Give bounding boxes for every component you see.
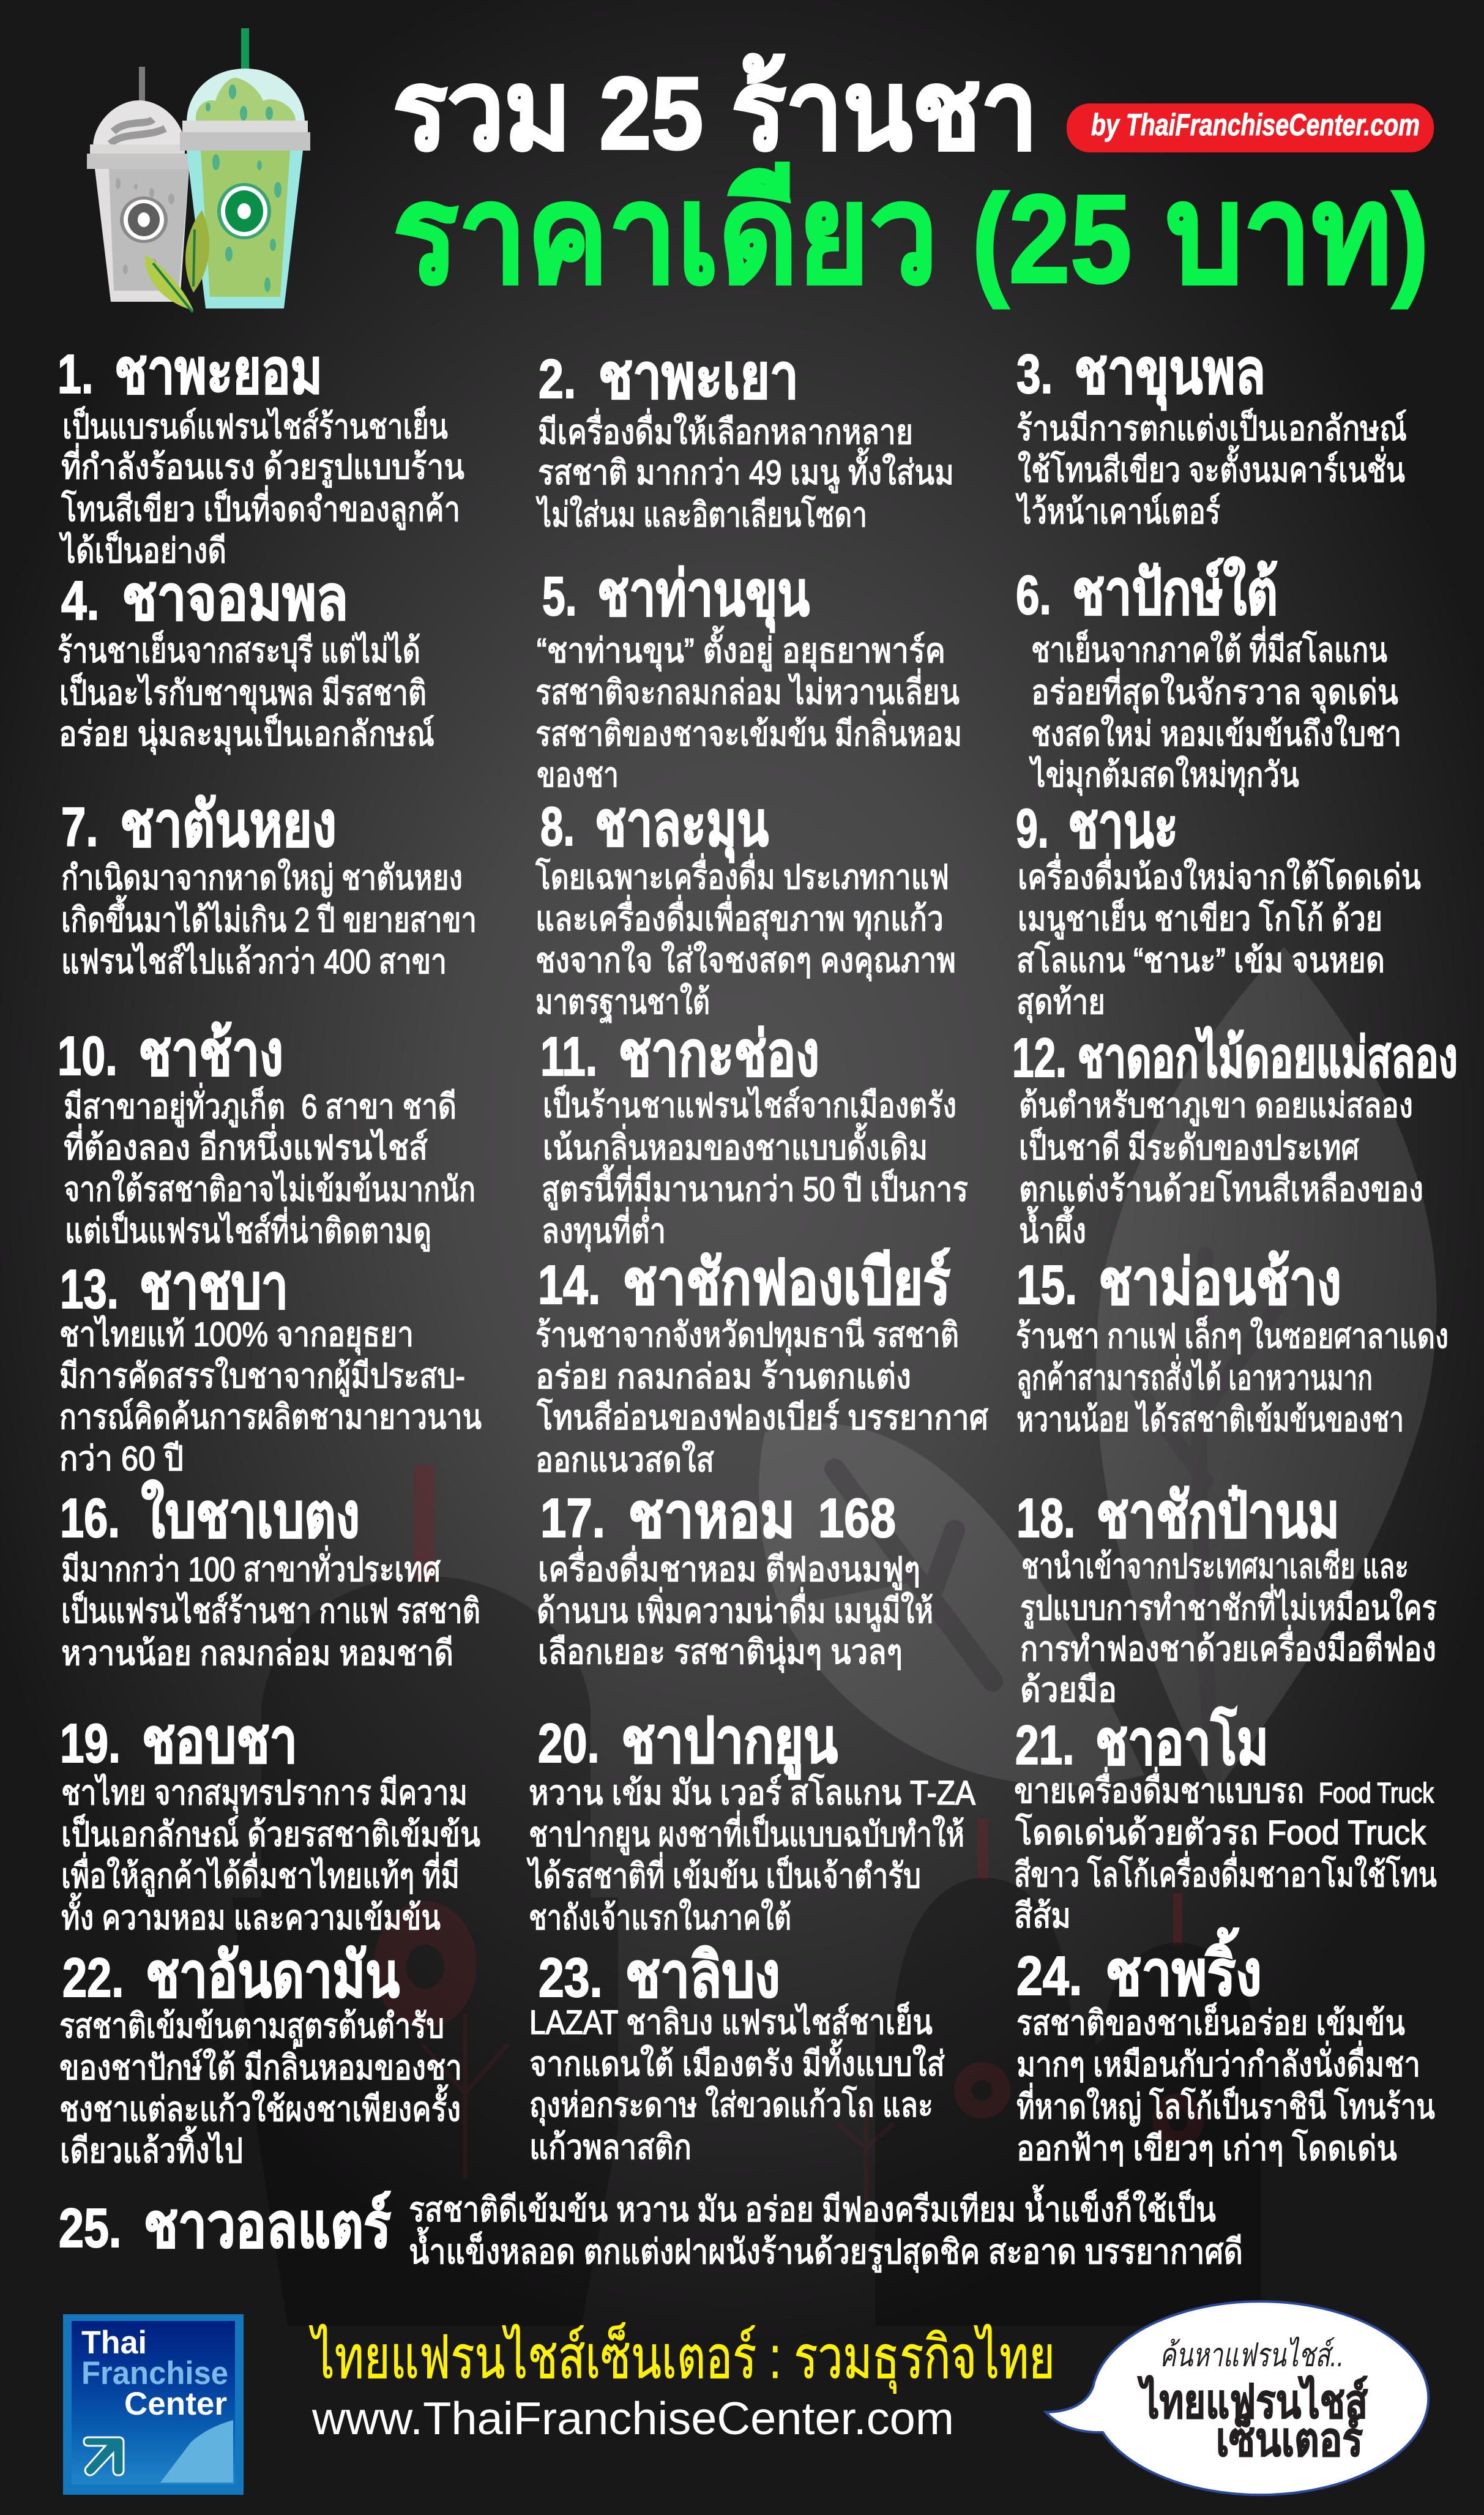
- description: เพื่อให้ลูกค้าได้ดื่มชาไทยแท้ๆ ที่มี: [61, 1852, 460, 1897]
- description: โดยเฉพาะเครื่องดื่ม ประเภทกาแฟ: [535, 853, 949, 896]
- speech bubble: ไทยแฟรนไชส์: [1137, 2375, 1368, 2428]
- heading: 1. ชาพะยอม: [58, 337, 323, 406]
- description: ใช้โทนสีเขียว จะตั้งนมคาร์เนชั่น: [1018, 446, 1405, 489]
- description: [64, 1083, 475, 1252]
- description: เลือกเยอะ รสชาตินุ่มๆ นวลๆ: [538, 1632, 903, 1673]
- description: [1019, 1086, 1423, 1250]
- description: รสชาติดีเข้มข้น หวาน มัน อร่อย มีฟองครีมเทียม น้ำแข็งก็ใช้เป็น: [409, 2185, 1216, 2229]
- description: สุดท้าย: [1016, 982, 1105, 1023]
- description: เป็นแฟรนไชส์ร้านชา กาแฟ รสชาติ: [61, 1590, 480, 1630]
- panel: 11 ชากะช่อง: [540, 1019, 968, 1252]
- description: โดดเด่นด้วยตัวรถ Food Truck: [1015, 1813, 1426, 1852]
- description: เกิดขึ้นมาได้ไม่เกิน 2 ปี ขยายสาขา: [61, 895, 477, 939]
- panel: 17 ชาหอม 168: [537, 1481, 933, 1673]
- description: มีสาขาอยู่ทั่วภูเก็ต 6 สาขา ชาดี: [64, 1083, 457, 1127]
- description: การณ์คิดค้นการผลิตชามายาวนาน: [59, 1397, 482, 1436]
- badge: by ThaiFranchiseCenter.com: [1067, 103, 1434, 152]
- description: รสชาติจะกลมกล่อม ไม่หวานเลี่ยน: [535, 668, 960, 711]
- description: ตกแต่งร้านด้วยโทนสีเหลืองของ: [1019, 1170, 1423, 1208]
- description: มาตรฐานชาใต้: [535, 982, 710, 1022]
- panel: 2 ชาพะเยา: [536, 342, 954, 534]
- description: เป็นร้านชาแฟรนไชส์จากเมืองตรัง: [543, 1085, 956, 1124]
- description: แต่เป็นแฟรนไชส์ที่น่าติดตามดู: [65, 1207, 431, 1252]
- description: [1020, 1547, 1437, 1709]
- heading: 24. ชาพริ้ง: [1016, 1927, 1262, 2008]
- description: Food Truck: [1319, 1777, 1434, 1809]
- description: [542, 1085, 968, 1252]
- description: ชาเย็นจากภาคใต้ ที่มีสโลแกน: [1031, 626, 1387, 669]
- panel: 25 ชาวอลแตร์: [59, 2185, 1243, 2273]
- description: ที่ต้องลอง อีกหนึ่งแฟรนไชส์: [64, 1124, 428, 1167]
- description: ไม่ใส่นม และอิตาเลียนโซดา: [536, 495, 867, 534]
- description: [61, 1773, 480, 1937]
- description: สีส้ม: [1014, 1896, 1071, 1935]
- heading: 20. ชาปากยูน: [538, 1706, 838, 1780]
- icon: green cup: [180, 28, 310, 308]
- description: [535, 1315, 988, 1479]
- description: สโลแกน “ชานะ” เข้ม จนหยด: [1016, 941, 1385, 979]
- description: ถุงห่อกระดาษ ใส่ขวดแก้วโถ และ: [529, 2085, 933, 2126]
- icon: gray cup: [87, 67, 189, 302]
- heading: 3. ชาขุนพล: [1016, 337, 1266, 411]
- description: น้ำผึ้ง: [1019, 1206, 1086, 1250]
- heading: 15. ชาม่อนช้าง: [1016, 1247, 1341, 1317]
- heading: 23. ชาลิบง: [539, 1940, 780, 2010]
- heading: 4. ชาจอมพล: [61, 563, 348, 633]
- heading: 5. ชาท่านขุน: [542, 559, 810, 633]
- heading: 2. ชาพะเยา: [539, 342, 799, 411]
- description: สูตรนี้ที่มีมานานกว่า 50 ปี เป็นการ: [542, 1165, 968, 1210]
- description: น้ำแข็งหลอด ตกแต่งฝาผนังร้านด้วยรูปสุดชิค สะอาด บรรยากาศดี: [409, 2227, 1243, 2273]
- panel: 19 ชอบชา: [60, 1706, 480, 1937]
- heading: 10. ชาช้าง: [58, 1018, 283, 1088]
- heading: 25. ชาวอลแตร์: [59, 2191, 391, 2260]
- description: [529, 2001, 945, 2166]
- heading: 22. ชาอันดามัน: [62, 1940, 400, 2010]
- panel: 12 ชาดอกไม้ดอยแม่สลอง: [1012, 1026, 1458, 1250]
- description: เครื่องดื่มชาหอม ตีฟองนมฟูๆ: [538, 1545, 920, 1590]
- description: มากๆ เหมือนกับว่ากำลังนั่งดื่มชา: [1016, 2041, 1420, 2083]
- logo: Thai Franchise Center: Center: [124, 2386, 227, 2422]
- description: [59, 2006, 462, 2170]
- description: ต้นตำหรับชาภูเขา ดอยแม่สลอง: [1019, 1086, 1413, 1126]
- title line 2: ราคาเดียว (25 บาท): [393, 157, 1429, 312]
- description: กว่า 60 ปี: [59, 1439, 184, 1478]
- description: [1016, 1315, 1449, 1438]
- description: เป็นแบรนด์แฟรนไชส์ร้านชาเย็น: [62, 406, 448, 446]
- panel: 9 ชานะ: [1016, 791, 1421, 1023]
- panel: 23 ชาลิบง: [529, 1940, 945, 2166]
- description: โทนสีเขียว เป็นที่จดจำของลูกค้า: [61, 485, 460, 530]
- description: [59, 1315, 482, 1478]
- panel: 8 ชาละมุน: [535, 789, 956, 1022]
- description: ลงทุนที่ต่ำ: [542, 1207, 666, 1252]
- description: ทั้ง ความหอม และความเข้มข้น: [61, 1893, 441, 1937]
- description: [409, 2185, 1243, 2273]
- description: ขายเครื่องดื่มชาแบบรถ: [1014, 1767, 1304, 1810]
- description: ของชา: [537, 755, 619, 794]
- panel: 24 ชาพริ้ง: [1016, 1927, 1435, 2167]
- description: [535, 626, 962, 794]
- description: แฟรนไชส์ไปแล้วกว่า 400 สาขา: [61, 942, 447, 981]
- description: [61, 1545, 480, 1672]
- panel: 5 ชาท่านขุน: [535, 559, 962, 794]
- description: อร่อย กลมกล่อม ร้านตกแต่ง: [535, 1357, 911, 1396]
- description: เมนูชาเย็น ชาเขียว โกโก้ ด้วย: [1018, 898, 1382, 940]
- description: ชาไทย จากสมุทรปราการ มีความ: [61, 1773, 468, 1814]
- description: รสชาติของชาเย็นอร่อย เข้มข้น: [1016, 2002, 1405, 2042]
- panel: 13 ชาชบา: [59, 1252, 482, 1478]
- description: มีการคัดสรรใบชาจากผู้มีประสบ-: [59, 1356, 465, 1397]
- heading: 13. ชาชบา: [60, 1252, 288, 1321]
- description: เป็นเอกลักษณ์ ด้วยรสชาติเข้มข้น: [61, 1814, 480, 1853]
- heading: 6. ชาปักษ์ใต้: [1016, 557, 1278, 627]
- panel: 1 ชาพะยอม: [58, 337, 464, 570]
- description: ชงชาแต่ละแก้วใช้ผงชาเพียงครั้ง: [59, 2085, 461, 2128]
- description: อร่อย นุ่มละมุนเป็นเอกลักษณ์: [59, 713, 434, 755]
- description: ร้านชาจากจังหวัดปทุมธานี รสชาติ: [535, 1315, 959, 1356]
- description: [535, 853, 956, 1022]
- description: จากแดนใต้ เมืองตรัง มีทั้งแบบใส่: [529, 2039, 945, 2083]
- description: ออกแนวสดใส: [535, 1440, 714, 1479]
- panel: 22 ชาอันดามัน: [59, 1940, 462, 2170]
- description: รสชาติเข้มข้นตามสูตรต้นตำรับ: [59, 2006, 444, 2047]
- description: [1016, 408, 1407, 531]
- heading: 18. ชาชักป๋านม: [1016, 1481, 1340, 1550]
- description: เครื่องดื่มน้องใหม่จากใต้โดดเด่น: [1018, 853, 1421, 896]
- logo: Thai Franchise Center: Franchise: [81, 2355, 228, 2391]
- description: ร้านมีการตกแต่งเป็นเอกลักษณ์: [1016, 408, 1407, 447]
- description: [59, 406, 464, 570]
- description: โทนสีอ่อนของฟองเบียร์ บรรยากาศ: [537, 1398, 988, 1437]
- description: [61, 858, 477, 981]
- description: ด้านบน เพิ่มความน่าดื่ม เมนูมีให้: [537, 1587, 933, 1632]
- watermark: enlarged tea leaves and cups: [233, 947, 1437, 2326]
- heading: 11. ชากะช่อง: [540, 1019, 819, 1089]
- description: เน้นกลิ่นหอมของชาแบบดั้งเดิม: [543, 1123, 928, 1167]
- description: [537, 1545, 933, 1673]
- description: กำเนิดมาจากหาดใหญ่ ชาตันหยง: [61, 858, 463, 897]
- description: ได้รสชาติที่ เข้มข้น เป็นเจ้าตำรับ: [527, 1852, 921, 1895]
- icon: tea leaves: [145, 210, 209, 312]
- description: รสชาติของชาจะเข้มข้น มีกลิ่นหอม: [535, 710, 962, 753]
- description: ด้วยมือ: [1020, 1670, 1117, 1709]
- description: [1014, 1767, 1437, 1935]
- description: [1016, 2002, 1435, 2167]
- heading: 14. ชาชักฟองเบียร์: [538, 1247, 950, 1317]
- heading: 16. ใบชาเบตง: [60, 1480, 360, 1550]
- description: ออกฟ้าๆ เขียวๆ เก่าๆ โดดเด่น: [1016, 2129, 1397, 2167]
- description: ชาถังเจ้าแรกในภาคใต้: [529, 1898, 791, 1937]
- header illustration: two iced tea cups with leaves: [87, 28, 310, 312]
- panel: 14 ชาชักฟองเบียร์: [535, 1247, 988, 1479]
- description: จากใต้รสชาติอาจไม่เข้มข้นมากนัก: [64, 1170, 475, 1208]
- speech bubble: [1046, 2301, 1428, 2495]
- panel: 10 ชาช้าง: [58, 1018, 475, 1252]
- description: [58, 630, 434, 755]
- footer website: www.ThaiFranchiseCenter.com: [311, 2393, 954, 2444]
- panel: 18 ชาชักป๋านม: [1016, 1481, 1437, 1709]
- description: ที่กำลังร้อนแรง ด้วยรูปแบบร้าน: [61, 443, 464, 488]
- panel: 16 ใบชาเบตง: [60, 1480, 480, 1672]
- heading: 7. ชาตันหยง: [61, 790, 337, 859]
- description: มีมากกว่า 100 สาขาทั่วประเทศ: [61, 1545, 441, 1588]
- description: [536, 408, 954, 534]
- description: ชงสดใหม่ หอมเข้มข้นถึงใบชา: [1031, 714, 1401, 753]
- description: ไว้หน้าเคาน์เตอร์: [1016, 492, 1220, 531]
- description: “ชาท่านขุน” ตั้งอยู่ อยุธยาพาร์ค: [537, 626, 945, 671]
- description: ชาปากยูน ผงชาที่เป็นแบบฉบับทำให้: [529, 1811, 964, 1855]
- logo: Thai Franchise Center: [63, 2314, 244, 2495]
- panel: 7 ชาตันหยง: [61, 790, 477, 981]
- speech bubble: เซ็นเตอร์: [1216, 2412, 1363, 2466]
- description: มีเครื่องดื่มให้เลือกหลากหลาย: [538, 408, 913, 451]
- description: ได้เป็นอย่างดี: [59, 530, 226, 570]
- description: [1016, 853, 1421, 1023]
- panel: 20 ชาปากยูน: [527, 1706, 976, 1937]
- heading: 8. ชาละมุน: [540, 789, 769, 863]
- description: ไข่มุกต้มสดใหม่ทุกวัน: [1029, 755, 1299, 796]
- description: LAZAT ชาลิบง แฟรนไชส์ชาเย็น: [529, 2001, 933, 2041]
- description: ร้านชาเย็นจากสระบุรี แต่ไม่ได้: [58, 630, 420, 671]
- description: ของชาปักษ์ใต้ มีกลิ่นหอมของชา: [59, 2044, 462, 2087]
- description: [527, 1773, 976, 1937]
- panel: 21 ชาอาโม: [1014, 1706, 1437, 1935]
- description: เดียวแล้วทิ้งไป: [60, 2126, 243, 2170]
- logo: Thai Franchise Center: Thai: [81, 2325, 147, 2361]
- description: เป็นชาดี มีระดับของประเทศ: [1019, 1127, 1359, 1167]
- heading: 9. ชานะ: [1016, 791, 1178, 861]
- description: และเครื่องดื่มเพื่อสุขภาพ ทุกแก้ว: [535, 895, 944, 940]
- footer tagline: ไทยแฟรนไชส์เซ็นเตอร์ : รวมธุรกิจไทย: [309, 2322, 1055, 2394]
- description: อร่อยที่สุดในจักรวาล จุดเด่น: [1031, 668, 1398, 713]
- description: หวาน เข้ม มัน เวอร์ สโลแกน T-ZA: [529, 1773, 976, 1812]
- panel: 6 ชาปักษ์ใต้: [1016, 557, 1401, 796]
- icon: blue wedge: [160, 2420, 233, 2483]
- description: แก้วพลาสติก: [529, 2128, 692, 2166]
- heading: 21. ชาอาโม: [1015, 1706, 1269, 1777]
- description: เป็นอะไรกับชาขุนพล มีรสชาติ: [59, 672, 427, 714]
- icon: arrow: [84, 2437, 124, 2475]
- heading: 19. ชอบชา: [60, 1706, 297, 1776]
- heading: 17. ชาหอม 168: [540, 1481, 896, 1550]
- description: ชาไทยแท้ 100% จากอยุธยา: [59, 1315, 414, 1355]
- speech bubble: ค้นหาแฟรนไชส์..: [1160, 2336, 1344, 2374]
- panel: 15 ชาม่อนช้าง: [1016, 1247, 1449, 1438]
- title line 1: รวม 25 ร้านชา: [393, 48, 1038, 173]
- panel: 3 ชาขุนพล: [1016, 337, 1407, 531]
- description: [1029, 626, 1401, 796]
- description: หวานน้อย กลมกล่อม หอมชาดี: [61, 1634, 453, 1672]
- panel: 4 ชาจอมพล: [58, 563, 434, 755]
- description: ชงจากใจ ใส่ใจชงสดๆ คงคุณภาพ: [535, 941, 956, 981]
- description: รสชาติ มากกว่า 49 เมนู ทั้งใส่นม: [538, 448, 954, 493]
